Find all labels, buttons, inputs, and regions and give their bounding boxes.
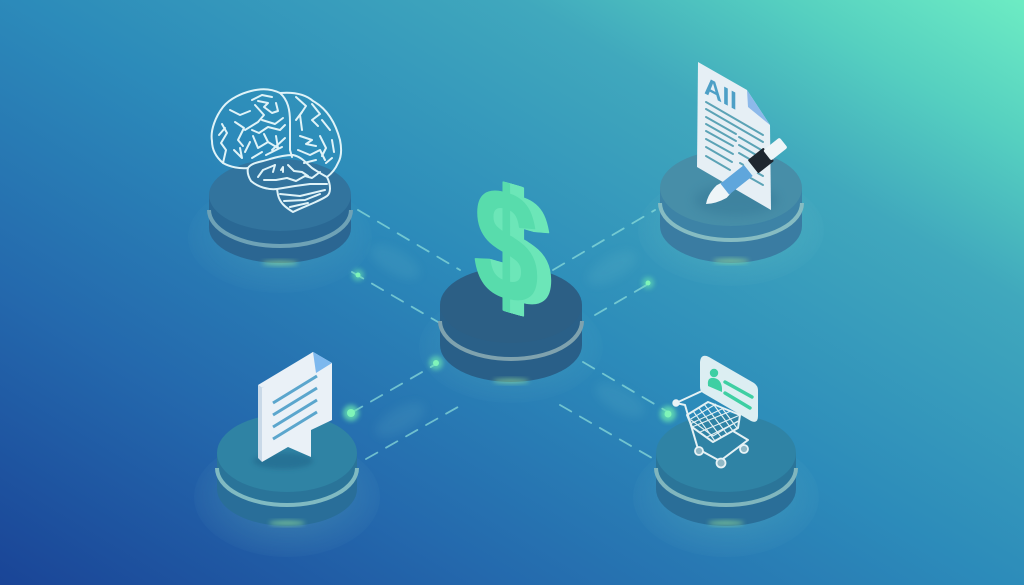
pen xyxy=(701,136,789,211)
icon: dollar sign: $ xyxy=(481,152,545,344)
icon: dollar sign: $ xyxy=(476,150,540,342)
icon: dollar sign: $ xyxy=(483,152,547,344)
icon: dollar sign: $ xyxy=(484,153,548,345)
document heading: AII xyxy=(704,71,737,116)
icon: dollar sign: $ xyxy=(475,150,539,342)
icon: dollar sign: $ xyxy=(480,151,544,344)
icon: dollar sign: $ xyxy=(485,153,549,345)
icon: dollar sign: $ xyxy=(487,153,551,346)
icon: dollar sign: $ xyxy=(477,151,541,343)
icon: shopping cart with card xyxy=(673,356,758,468)
icon: brain xyxy=(212,89,341,212)
podium: document xyxy=(638,150,824,286)
podium: note xyxy=(194,414,380,557)
faint circuit texture xyxy=(365,238,650,444)
icon: dollar sign: $ xyxy=(479,151,543,343)
icon: document with pen xyxy=(697,62,789,211)
icon: dollar sign: $ xyxy=(474,150,538,342)
podium: cart xyxy=(633,414,819,557)
cart frame xyxy=(676,391,748,461)
icon: dollar sign: $ xyxy=(478,151,542,343)
connector lines xyxy=(351,210,668,459)
connector glow nodes xyxy=(343,269,676,422)
icon: dollar sign: $ xyxy=(486,153,550,345)
podium: brain xyxy=(188,159,372,293)
podium: dollar xyxy=(419,267,603,403)
profile card xyxy=(700,356,758,422)
icon: note xyxy=(258,352,332,462)
icon: dollar sign: $ xyxy=(488,154,552,346)
icon: dollar sign: $ xyxy=(482,152,546,344)
cart handle and wheels xyxy=(673,400,748,468)
